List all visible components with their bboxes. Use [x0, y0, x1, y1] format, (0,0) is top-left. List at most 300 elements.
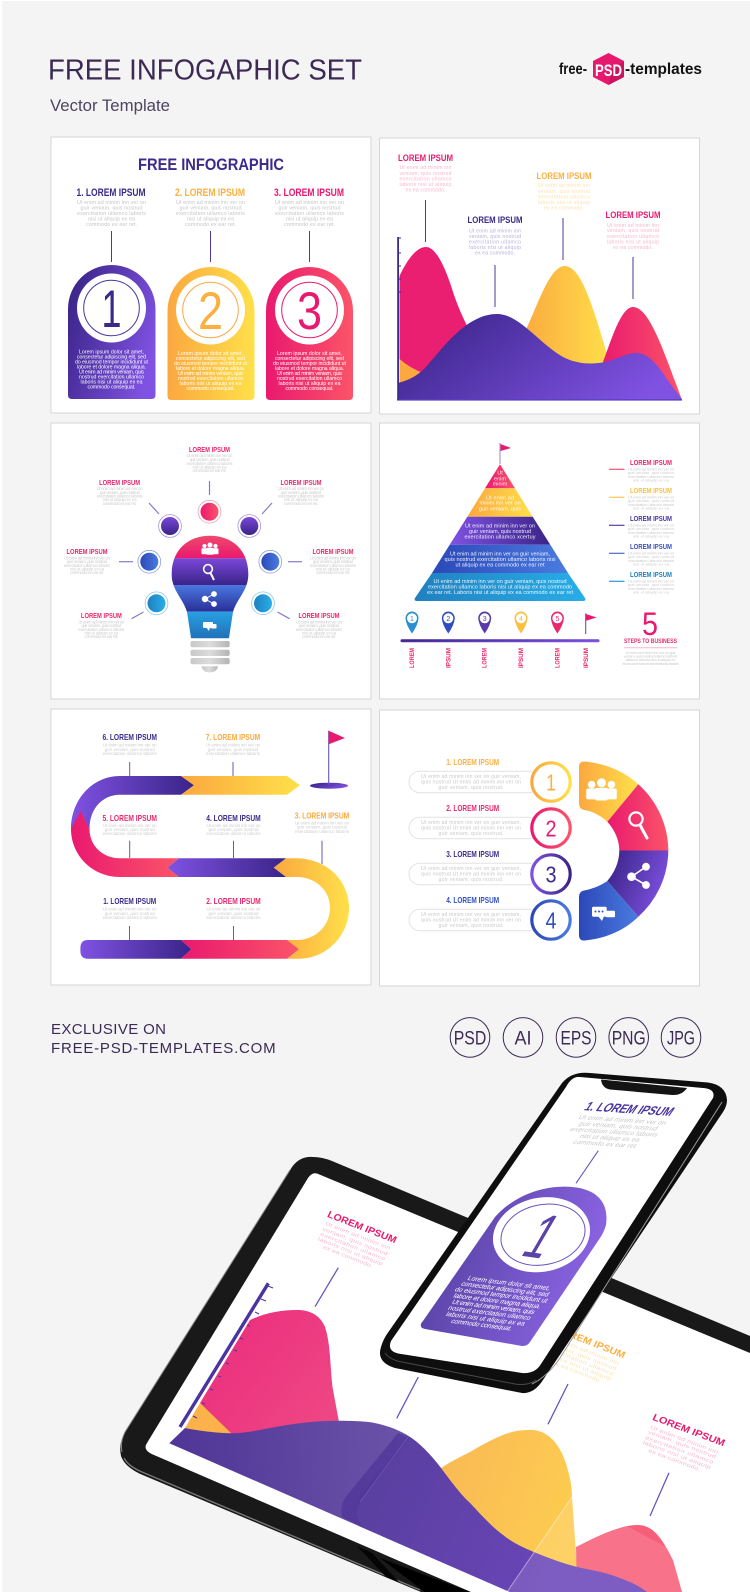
steps to business callout: ullamco laboris nisi ut aliquip ex — [626, 657, 676, 662]
label 7: guir veniam, quis nostrud — [208, 747, 259, 752]
map pins timeline: 1 — [410, 616, 414, 623]
label: yellow peak: exercitation ullamco — [538, 194, 590, 200]
card 2: labore et dolore magna aliqua. — [176, 366, 245, 372]
step legend: nisi ut aliquip ex ea — [633, 562, 670, 566]
label: lower left: LOREM IPSUM — [81, 611, 122, 620]
label 4 — [206, 813, 261, 836]
step legend: guir veniam, quis nostrud — [628, 526, 674, 531]
card 1: consectetur adipiscing elit, sed — [77, 354, 146, 360]
format badges: PNG — [612, 1028, 646, 1050]
column 1 header text: guir veniam, quis nostrud — [80, 206, 142, 212]
row 3: 3. LOREM IPSUM — [446, 849, 499, 859]
label 2: exercitation ullamco laboris — [206, 915, 261, 920]
label: pink peak — [398, 153, 453, 194]
row 3: quis nostrud Ut enim ad minim inn ver on — [421, 872, 521, 878]
card 3: do eiusmod tempor incididunt ut — [273, 361, 347, 367]
label 5: guir veniam, quis nostrud — [105, 827, 155, 832]
timeline labels: LOREM — [555, 648, 561, 668]
pyramid: Ut — [497, 471, 503, 477]
label 2: 2. LOREM IPSUM — [206, 896, 261, 906]
icon: chat — [592, 907, 615, 921]
label: upper left: LOREM IPSUM — [99, 478, 140, 487]
label 6 — [102, 732, 157, 756]
label: middle right: commodo ex ear ret. — [316, 570, 350, 575]
tablet label: pink: laboris nisi ut aliquip — [317, 1236, 384, 1267]
pyramid: ut aliquip ex ea commodo ex ear ret — [456, 563, 545, 569]
column 1 header text: exercitation ullamco laboris — [77, 211, 146, 217]
card 2: Lorem ipsum dolor sit amet, — [178, 351, 243, 357]
phone card number: 1 — [511, 1201, 573, 1272]
pyramid: guir veniam, quis — [479, 506, 521, 512]
map pins timeline: 3 — [483, 616, 487, 623]
label: pink peak: veniam, quis nostrud — [400, 171, 452, 177]
tablet label: yellow: Ut enim ad minim inn — [553, 1336, 620, 1367]
label: top: nisi ut aliquip ex ea — [192, 464, 227, 470]
column 3 header text: commodo ex ear ret. — [284, 222, 335, 228]
card 2: laboris nisi ut aliquip ex ea — [180, 381, 242, 387]
label 3: guir veniam, quis nostrud — [297, 824, 348, 830]
pyramid: Ut enim ad minim inn ver on — [465, 523, 535, 529]
tablet label: red: Ut enim ad minim inn — [649, 1425, 720, 1456]
road segment: top yellow — [181, 776, 300, 795]
flag on pyramid — [500, 443, 511, 464]
label: red peak: LOREM IPSUM — [606, 210, 661, 221]
step legend: Ut enim ad minim inn ver on — [628, 550, 674, 556]
road segment: top purple — [71, 776, 194, 829]
card 1: commodo consequat. — [88, 384, 136, 390]
label: red peak: veniam, quis nostrud — [607, 228, 659, 234]
label: lower right: nisi ut aliquip ex ea — [302, 630, 337, 636]
tablet label: red: exercitation ullamco — [644, 1435, 715, 1466]
title: FREE INFOGAPHIC SET — [48, 54, 362, 86]
label: top: LOREM IPSUM — [189, 445, 230, 454]
label: upper right: Ut enim ad minim inn ver on — [278, 486, 325, 491]
label: middle left: LOREM IPSUM — [66, 547, 108, 556]
connector lines — [130, 762, 322, 940]
label 4: 4. LOREM IPSUM — [206, 813, 261, 823]
pyramid: Ut enim ad minim inn ver on guir veniam, quis nostrud — [434, 579, 566, 585]
step legend: nisi ut aliquip ex ea — [633, 534, 670, 538]
card 2 — [168, 267, 254, 400]
label: pink peak: LOREM IPSUM — [398, 153, 453, 164]
label: yellow peak: laboris nisi ut aliquip — [538, 200, 590, 206]
column 2 header text: commodo ex ear ret. — [185, 222, 236, 228]
label: purple peak: Ut enim ad minim inn — [469, 228, 521, 234]
icon: magnifier — [204, 565, 214, 580]
map pins timeline: 2 — [446, 616, 450, 623]
column 2 header text: 2. LOREM IPSUM — [175, 187, 245, 199]
row 1: Ut enim ad minim inn ver on guir veniam, — [421, 774, 521, 780]
phone card text: Lorem ipsum dolor sit amet, — [466, 1275, 552, 1292]
timeline labels: IPSUM — [584, 648, 590, 668]
card 1: nostrud exercitation ullamco — [79, 374, 144, 380]
label: upper right: exercitation ullamco laboris — [278, 494, 324, 498]
label: purple peak: exercitation ullamco — [469, 240, 521, 246]
label: lower right: exercitation ullamco laboris — [296, 627, 342, 632]
label 4: Ut enim ad minim inn ver on — [206, 823, 261, 828]
label: top: commodo ex ear ret. — [192, 468, 226, 473]
segment: blue — [579, 881, 638, 941]
step legend: exercitation ullamco laboris — [628, 502, 674, 507]
label 5: 5. LOREM IPSUM — [102, 813, 157, 823]
tablet label: pink: exercitation ullamco — [319, 1231, 387, 1262]
row 4: 4. LOREM IPSUM — [446, 895, 499, 905]
column 1 header text: commodo ex ear ret. — [86, 222, 137, 228]
card 3: laboris nisi ut aliquip ex ea — [278, 381, 341, 387]
timeline labels: LOREM — [483, 648, 489, 668]
row 2 — [409, 803, 570, 847]
panel: light bulb diagram — [51, 423, 371, 699]
tablet label: red: ex ea commodo. — [647, 1448, 702, 1473]
column 2 header text: Ut enim ad minim inn ver on — [176, 200, 245, 206]
steps to business callout: Ut enim ad minim inn ver on guir — [626, 650, 676, 655]
card 3: consectetur adipiscing elit, sed — [275, 356, 344, 362]
step legend: Ut enim ad minim inn ver on — [628, 494, 674, 500]
column 3 header text: guir veniam, quis nostrud — [278, 206, 340, 212]
road segment: bottom pink — [181, 940, 299, 959]
label: yellow peak: ex ea commodo. — [544, 206, 584, 212]
label: top: exercitation ullamco laboris — [186, 461, 232, 466]
card 1: do eiusmod tempor incididunt ut — [75, 360, 149, 366]
phone heading text: nisi ut aliquip ex ea — [578, 1134, 641, 1144]
label: top — [186, 445, 233, 473]
row 1 — [409, 757, 570, 801]
phone heading text: exercitation ullamco laboris — [568, 1127, 660, 1138]
label 1: exercitation ullamco laboris — [103, 915, 157, 920]
phone mockup — [380, 1073, 727, 1393]
label: middle right — [310, 547, 357, 575]
heading: FREE INFOGRAPHIC — [138, 155, 284, 174]
card 2: consectetur adipiscing elit, sed — [176, 356, 245, 362]
road segment: bottom purple — [80, 940, 191, 959]
area chart — [397, 237, 682, 401]
label 2: Ut enim ad minim inn ver on — [206, 906, 261, 912]
label: middle right: LOREM IPSUM — [312, 547, 354, 556]
phone card text: consectetur adipiscing elit, sed — [459, 1281, 550, 1298]
label: middle left: commodo ex ear ret. — [70, 570, 104, 575]
road segment: yellow curve — [274, 858, 349, 959]
label: lower left: exercitation ullamco laboris — [78, 627, 124, 632]
tablet label: yellow: veniam, quis nostrud — [550, 1341, 618, 1372]
card 3: nostrud exercitation ullamco — [277, 376, 342, 382]
column 2 header text: guir veniam, quis nostrud — [180, 206, 242, 212]
label 3: Ut enim ad minim inn ver on — [295, 820, 350, 826]
card 3: commodo consequat. — [286, 386, 334, 392]
label: upper left: nisi ut aliquip ex ea — [103, 497, 137, 502]
tablet mockup — [120, 1157, 750, 1592]
label 1: 1. LOREM IPSUM — [103, 896, 156, 906]
timeline labels: IPSUM — [446, 648, 452, 668]
map pins timeline — [400, 611, 600, 642]
panel: three numbered cards — [51, 137, 371, 413]
label: lower left — [78, 611, 125, 639]
label: lower right: LOREM IPSUM — [298, 611, 340, 620]
pyramid: guir veniam, quis nostrud — [469, 529, 531, 535]
card 2: commodo consequat. — [186, 386, 234, 392]
row 3: Ut enim ad minim inn ver on guir veniam, — [421, 866, 521, 872]
card 2: nostrud exercitation ullamco — [178, 376, 243, 382]
timeline labels — [410, 648, 590, 668]
steps to business callout: 5 — [642, 606, 658, 642]
timeline labels: IPSUM — [519, 648, 525, 668]
step legend: guir veniam, quis nostrud — [628, 470, 674, 475]
tablet label: red: laboris nisi ut aliquip — [642, 1440, 712, 1471]
label: middle left: Ut enim ad minim inn ver on — [64, 556, 111, 560]
phone card text: labore et dolore magna aliqua. — [452, 1293, 543, 1310]
panel: pyramid steps — [380, 423, 700, 699]
logo: free-psd-templates: -templates — [625, 61, 702, 78]
row 2: 2 — [546, 816, 556, 842]
row 3: 3 — [546, 862, 556, 888]
pyramid — [415, 464, 585, 601]
card 2: 2 — [198, 282, 223, 341]
road segment: middle purple — [168, 858, 286, 877]
phone heading text: guir veniam, quis nostrud — [577, 1121, 659, 1132]
label: pink peak: exercitation ullamco — [400, 176, 452, 182]
phone card text: Ut enim ad minim veniam, quis — [450, 1299, 537, 1316]
label: lower right: Ut enim ad minim inn ver on — [296, 620, 343, 624]
phone card — [421, 1187, 607, 1346]
label: lower right — [296, 611, 343, 639]
column 1 header text: 1. LOREM IPSUM — [76, 187, 146, 199]
pyramid: quis nostrud exercitation ullamco laboris nisi — [444, 557, 556, 563]
label 1 — [103, 896, 157, 920]
card 3: 3 — [297, 282, 322, 341]
label: purple peak: LOREM IPSUM — [468, 215, 523, 226]
label: upper right — [278, 478, 325, 506]
card 3: labore et dolore magna aliqua. — [275, 366, 344, 372]
label 6: exercitation ullamco laboris — [103, 751, 157, 756]
row 4: Ut enim ad minim inn ver on guir veniam, — [421, 912, 521, 918]
column 1 header text: Ut enim ad minim inn ver on — [77, 200, 146, 206]
label: middle right: guir veniam, quis nostrud — [313, 559, 354, 564]
card 3: Ut enim ad minim veniam, quis — [277, 371, 342, 377]
panel: semicircle list — [380, 710, 700, 986]
format badges: JPG — [667, 1028, 695, 1050]
phone card number — [486, 1188, 597, 1281]
step legend: LOREM IPSUM — [630, 570, 672, 579]
pyramid: Ut enim ad minim inn ver on guir veniam, — [450, 551, 550, 557]
phone card text: do eiusmod tempor incididunt ut — [453, 1287, 549, 1305]
label: middle left: exercitation ullamco laboris — [64, 563, 110, 568]
icon: people — [586, 778, 617, 800]
row 4 — [409, 895, 570, 939]
step legend: LOREM IPSUM — [630, 542, 672, 551]
icon: chat — [203, 622, 216, 631]
column 3 header text: nisi ut aliquip ex ea — [286, 216, 333, 222]
phone heading text: Ut enim ad minim inn ver on — [577, 1115, 668, 1126]
row 3: guir veniam, quis nostrud. — [438, 877, 504, 883]
pyramid: exercitation ullamco laboris nisi ut aliquip ex ea commodo — [428, 585, 572, 591]
label 7: 7. LOREM IPSUM — [206, 732, 260, 742]
label 5: exercitation ullamco laboris — [103, 831, 157, 836]
exclusive note — [51, 1021, 276, 1057]
step legend: Ut enim ad minim inn ver on — [628, 522, 674, 528]
label: top: guir veniam, quis nostrud — [190, 457, 230, 462]
label 1: guir veniam, quis nostrud — [105, 911, 155, 916]
pyramid: ex ear ret. Laboris nisi ut aliquip ex ea commodo ex ear ret — [427, 590, 573, 596]
column 3 header text — [274, 187, 344, 228]
format badges — [450, 1018, 701, 1057]
label 5: Ut enim ad minim inn ver on — [103, 823, 157, 828]
row 2: guir veniam, quis nostrud. — [438, 831, 504, 837]
tablet label: pink: veniam, quis nostrud — [322, 1226, 389, 1257]
card 1: labore et dolore magna aliqua. — [77, 364, 146, 370]
label 6: guir veniam, quis nostrud — [105, 747, 155, 752]
row 2: Ut enim ad minim inn ver on guir veniam, — [421, 820, 521, 826]
row 4: 4 — [546, 908, 557, 934]
row 2: 2. LOREM IPSUM — [446, 803, 499, 813]
label 6: Ut enim ad minim inn ver on — [103, 742, 157, 748]
tablet label: red: veniam, quis nostrud — [647, 1429, 717, 1460]
label: yellow peak: Ut enim ad minim inn — [538, 183, 590, 189]
step legend: exercitation ullamco laboris — [628, 530, 674, 535]
column 1 header text: nisi ut aliquip ex ea — [88, 216, 135, 222]
tablet label: yellow: LOREM IPSUM — [554, 1325, 627, 1361]
node circles — [138, 500, 282, 615]
label: lower left: guir veniam, quis nostrud — [81, 623, 122, 628]
label: middle right: nisi ut aliquip ex ea — [316, 566, 351, 572]
card 1: Lorem ipsum dolor sit amet, — [79, 350, 144, 356]
icon: share — [628, 863, 649, 888]
tablet label: pink: LOREM IPSUM — [325, 1210, 398, 1246]
phone card text: laboris nisi ut aliquip ex ea — [444, 1311, 526, 1328]
label: upper right: nisi ut aliquip ex ea — [284, 497, 319, 502]
column 2 header text — [175, 187, 245, 228]
column 3 header text: Ut enim ad minim inn ver on — [275, 200, 344, 206]
label: upper left: guir veniam, quis nostrud — [100, 490, 140, 495]
step legend: guir veniam, quis nostrud — [628, 554, 674, 559]
pyramid: exercitation ullamco xcertuy — [464, 535, 536, 541]
label: purple peak: laboris nisi ut aliquip — [469, 245, 521, 251]
card 1: 1 — [102, 280, 122, 339]
label 3: exercitation ullamco laboris — [295, 829, 350, 834]
label: yellow peak — [536, 171, 592, 212]
label 3: 3. LOREM IPSUM — [295, 810, 349, 820]
pyramid: Ut enim ad — [486, 495, 514, 501]
label: upper right: LOREM IPSUM — [280, 478, 322, 487]
icon: magnifier — [629, 812, 647, 838]
label 2 — [206, 896, 261, 920]
column 2 header text: nisi ut aliquip ex ea — [187, 216, 234, 222]
phone card text — [433, 1275, 557, 1334]
step legend: LOREM IPSUM — [630, 486, 672, 495]
label: upper right: guir veniam, quis nostrud — [281, 490, 322, 495]
label: upper left: Ut enim ad minim inn ver on — [97, 486, 143, 491]
label 7 — [206, 732, 261, 756]
label 2: guir veniam, quis nostrud — [208, 911, 259, 916]
label: red peak: exercitation ullamco — [607, 234, 659, 240]
label: pink peak: laboris nisi ut aliquip — [400, 182, 452, 188]
label: lower right: commodo ex ear ret. — [302, 634, 336, 639]
step legend: LOREM IPSUM — [630, 458, 672, 467]
label: top: Ut enim ad minim inn ver on — [186, 453, 233, 458]
step legend: nisi ut aliquip ex ea — [633, 506, 670, 510]
step legend: exercitation ullamco laboris — [628, 474, 674, 479]
card 2: Ut enim ad minim veniam, quis — [178, 371, 243, 377]
logo: free-psd-templates: free- — [559, 61, 587, 78]
format badges: PSD — [454, 1028, 486, 1050]
column 3 header text: exercitation ullamco laboris — [275, 211, 344, 217]
label: middle right: Ut enim ad minim inn ver on — [310, 556, 357, 560]
label: middle left: nisi ut aliquip ex ea — [70, 566, 105, 572]
row 1: 1. LOREM IPSUM — [446, 757, 499, 767]
tablet label: pink: Ut enim ad minim inn — [324, 1221, 392, 1252]
road segment: pink curve — [71, 811, 179, 877]
column 1 header text — [76, 187, 146, 228]
card 1: laboris nisi ut aliquip ex ea — [80, 380, 143, 386]
label: purple peak: veniam, quis nostrud — [469, 234, 521, 240]
label: red peak — [606, 210, 661, 251]
label: lower left: Ut enim ad minim inn ver on — [78, 620, 125, 624]
label 4: guir veniam, quis nostrud — [208, 827, 259, 832]
step legend: Ut enim ad minim inn ver on — [628, 578, 674, 584]
tablet label: yellow: exercitation ullamco — [548, 1346, 615, 1377]
tablet label: pink — [312, 1210, 398, 1273]
label 7: Ut enim ad minim inn ver on — [206, 742, 261, 748]
label 6: 6. LOREM IPSUM — [102, 732, 157, 742]
tablet label: yellow — [541, 1325, 627, 1388]
step legend: Ut enim ad minim inn ver on — [628, 466, 674, 472]
label: middle left — [64, 547, 111, 575]
label: yellow peak: veniam, quis nostrud — [538, 189, 590, 195]
card 1: Ut enim ad minim veniam, quis — [79, 370, 144, 376]
step legend: exercitation ullamco laboris — [628, 558, 674, 563]
label: yellow peak: LOREM IPSUM — [536, 171, 592, 182]
panel: area chart — [380, 138, 700, 414]
label: middle left: guir veniam, quis nostrud — [67, 559, 108, 564]
row 3 — [409, 849, 570, 893]
card 2: do eiusmod tempor incididunt ut — [174, 361, 248, 367]
column 3 header text: 3. LOREM IPSUM — [274, 187, 344, 199]
pyramid: enim — [494, 476, 506, 482]
tablet label: red: LOREM IPSUM — [651, 1413, 726, 1449]
timeline labels: LOREM — [410, 648, 416, 668]
card 3: Lorem ipsum dolor sit amet, — [277, 351, 342, 357]
steps to business callout: ex ea commodo ex ear ret laboris eiusdel — [622, 661, 679, 666]
label: pink peak: ex ea commodo. — [406, 188, 446, 194]
map pins timeline: 5 — [555, 616, 559, 623]
label 3 — [295, 810, 350, 834]
pyramid: minim inn ver on — [480, 501, 520, 507]
tablet label: red — [637, 1413, 726, 1476]
label 7: exercitation ullamco laboris — [206, 751, 261, 756]
row 4: quis nostrud Ut enim ad minim inn ver on — [421, 918, 521, 924]
phone heading text: 1. LOREM IPSUM — [581, 1100, 677, 1119]
label: upper left: exercitation ullamco laboris — [97, 494, 143, 498]
label: purple peak — [468, 215, 523, 256]
step legend: guir veniam, quis nostrud — [628, 582, 674, 587]
pyramid: minim — [493, 482, 508, 488]
label: lower right: guir veniam, quis nostrud — [299, 623, 340, 628]
column 2 header text: exercitation ullamco laboris — [176, 211, 245, 217]
step legend: exercitation ullamco laboris — [628, 586, 674, 591]
steps to business callout: STEPS TO BUSINESS — [624, 638, 677, 645]
step legend: LOREM IPSUM — [630, 514, 672, 523]
goal flag — [310, 731, 348, 789]
logo: free-psd-templates: PSD — [595, 61, 622, 80]
icon: people — [202, 542, 218, 555]
phone notch — [601, 1080, 687, 1095]
card 1 — [68, 265, 156, 399]
label: pink peak: Ut enim ad minim inn — [400, 165, 452, 171]
tablet screen chart — [169, 1282, 682, 1592]
segment: purple — [607, 850, 668, 917]
label: red peak: laboris nisi ut aliquip — [607, 240, 659, 246]
phone heading text: commodo ex ear ret. — [571, 1139, 640, 1150]
row 1: quis nostrud Ut enim ad minim inn ver on — [421, 780, 521, 786]
tablet label: yellow: laboris nisi ut aliquip — [545, 1352, 613, 1382]
